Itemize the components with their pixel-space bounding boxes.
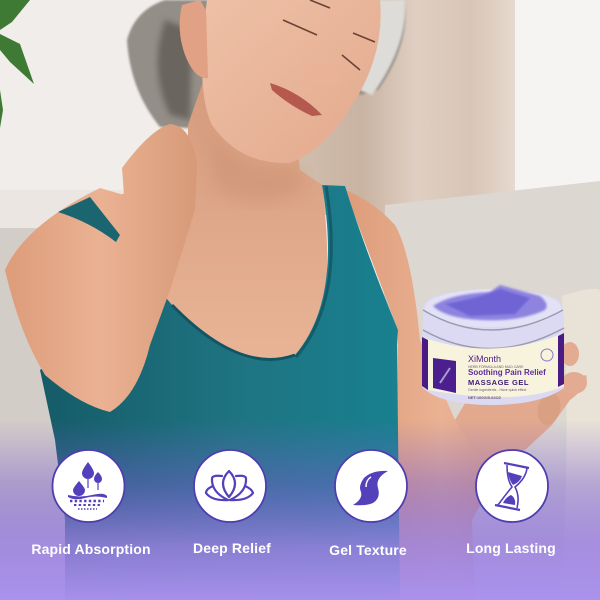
plant leaves xyxy=(0,0,34,128)
icon: deep relief lotus xyxy=(194,450,266,522)
label: long lasting: Long Lasting xyxy=(466,540,556,556)
icon: rapid absorption xyxy=(52,450,124,522)
label: rapid absorption: Rapid Absorption xyxy=(31,541,151,557)
icon: gel texture xyxy=(335,450,407,522)
right shoulder and forearm xyxy=(345,190,540,600)
purple gradient fade xyxy=(0,420,600,600)
product jar: NET:160G/5.63OZ xyxy=(468,395,502,400)
icon: long lasting hourglass xyxy=(476,450,548,522)
product jar xyxy=(422,285,564,405)
hair xyxy=(127,0,406,128)
raised arm and hand on neck xyxy=(5,124,197,412)
neck and chest xyxy=(118,70,327,361)
tank top xyxy=(40,185,400,600)
jar brand text: XiMonth xyxy=(468,354,501,364)
product jar: MASSAGE GEL xyxy=(468,378,529,387)
product jar: HERB FORMULA AND MUD CARE xyxy=(468,365,524,369)
chin shadow xyxy=(205,125,305,202)
left tank strap xyxy=(58,197,120,242)
label: deep relief: Deep Relief xyxy=(193,540,271,556)
label: gel texture: Gel Texture xyxy=(329,542,407,558)
sofa xyxy=(0,181,600,600)
face xyxy=(180,0,381,163)
hand holding jar xyxy=(455,342,587,462)
product jar: Gentle ingredients - Have quick effect xyxy=(468,388,526,392)
product jar: Soothing Pain Relief xyxy=(468,368,546,377)
